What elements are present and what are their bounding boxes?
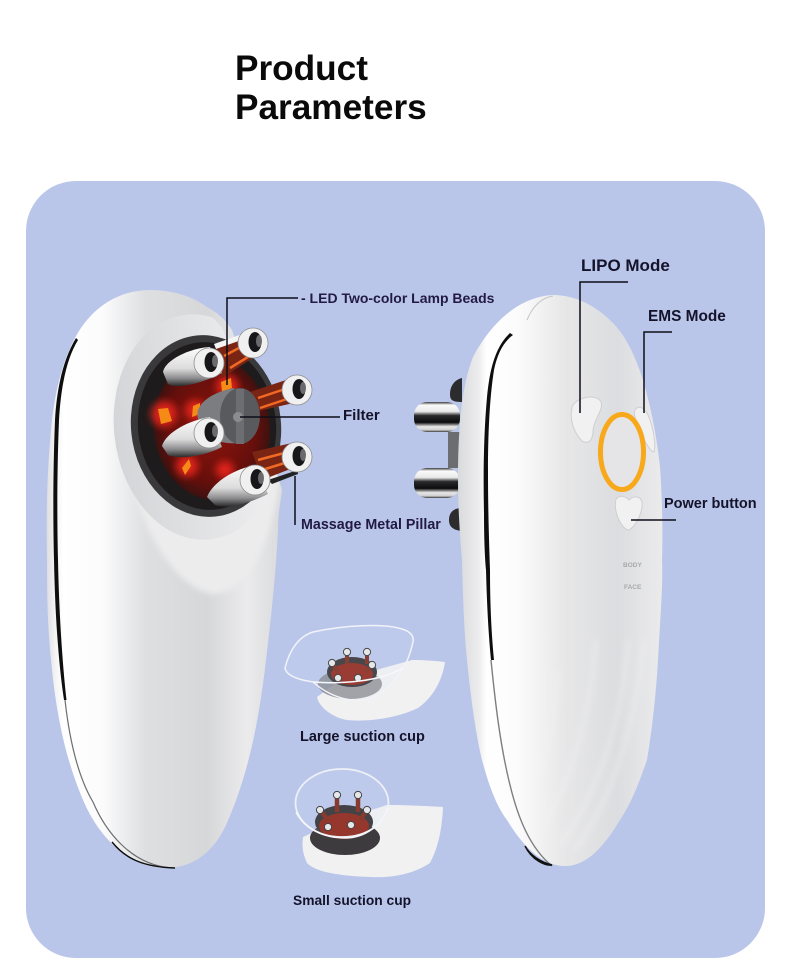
mode labels on device: FACE <box>624 584 642 591</box>
massage pillars back <box>214 328 312 484</box>
device stub <box>302 805 443 877</box>
callout: massage metal pillar: Massage Metal Pillar <box>301 517 441 533</box>
chrome seam tip <box>525 846 552 865</box>
base <box>310 821 380 855</box>
lower head crease shading <box>141 474 280 594</box>
LIPO button <box>571 397 602 442</box>
panel: lavender background <box>26 181 765 958</box>
device stub <box>317 660 445 721</box>
LED glow <box>151 375 238 479</box>
callout: LED two-color lamp beads: - LED Two-color Lamp Beads <box>301 290 495 306</box>
label: large suction cup: Large suction cup <box>300 729 425 745</box>
callout: LIPO mode <box>580 256 670 413</box>
red LED interior <box>147 350 277 506</box>
pins behind the right device <box>414 378 462 531</box>
device: left massager front view <box>47 290 312 868</box>
mode labels on device <box>623 562 642 591</box>
title: Parameters <box>235 88 427 127</box>
massage pillars front <box>162 347 270 507</box>
power button <box>615 496 642 530</box>
black edge seam <box>53 338 78 700</box>
head dark ring <box>122 328 290 524</box>
label: small suction cup: Small suction cup <box>293 893 411 908</box>
base <box>318 669 382 699</box>
callout: LIPO mode: LIPO Mode <box>581 256 670 275</box>
ridged lower texture <box>534 640 644 850</box>
callout: LED two-color lamp beads <box>227 290 495 385</box>
left device body <box>47 290 282 868</box>
title <box>235 49 427 127</box>
right device front face line <box>527 296 553 320</box>
LED beads <box>158 378 232 475</box>
right device shell <box>458 295 662 866</box>
cup glass <box>296 769 388 837</box>
filter <box>197 388 260 444</box>
orange ring dial <box>600 414 644 490</box>
callout: power button: Power button <box>664 496 757 512</box>
pins <box>320 795 367 820</box>
title: Product <box>235 49 368 88</box>
callout: filter: Filter <box>343 407 380 424</box>
large suction cup <box>285 626 445 721</box>
callout: filter <box>240 407 380 424</box>
callout: EMS mode: EMS Mode <box>648 308 726 325</box>
lower chrome seam <box>65 700 172 868</box>
mode labels on device: BODY <box>623 562 642 569</box>
device: right massager control view <box>414 295 662 866</box>
black seam <box>484 333 513 660</box>
small suction cup <box>296 769 443 877</box>
lower chrome seam <box>491 660 552 866</box>
pins <box>332 652 372 678</box>
head recess <box>114 314 226 540</box>
EMS button <box>634 407 655 452</box>
cup glass <box>285 626 413 700</box>
callout: power button <box>631 496 757 520</box>
callout: EMS mode <box>644 308 726 413</box>
